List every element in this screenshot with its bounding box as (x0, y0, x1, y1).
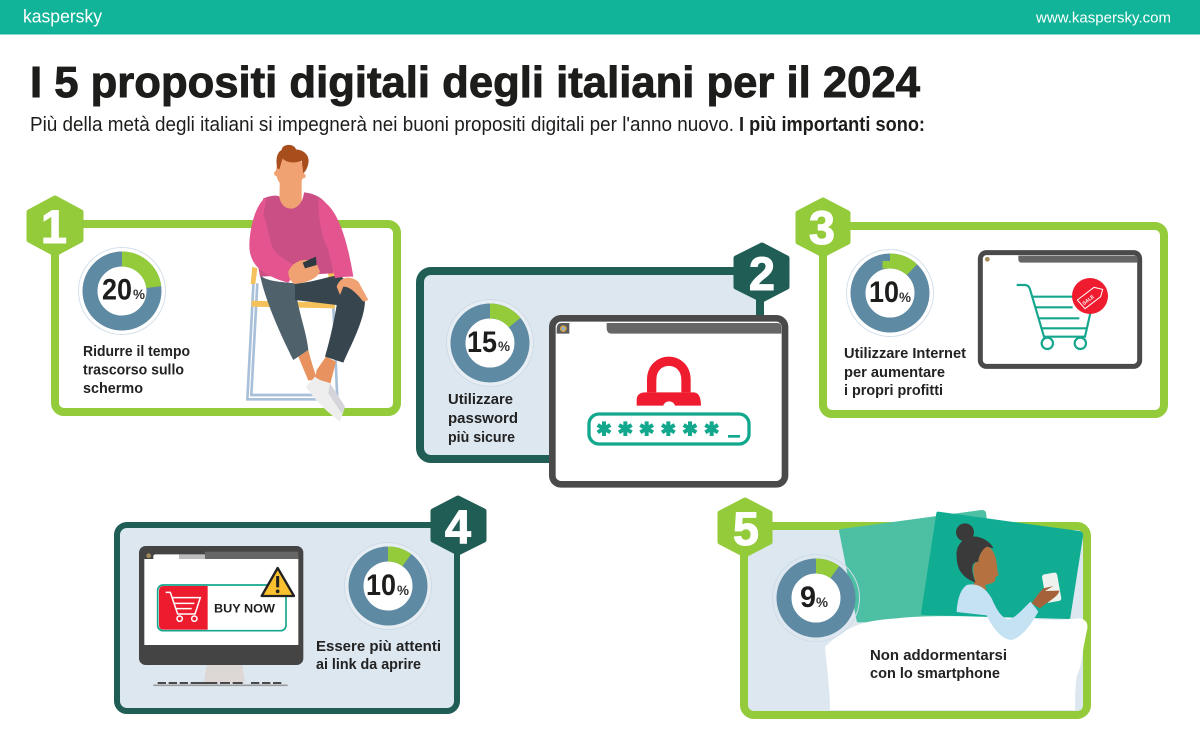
browser window with lock and password (552, 318, 785, 484)
badge 5 (720, 500, 770, 555)
label 3 (844, 345, 966, 399)
badge 2 (736, 245, 787, 300)
badge 3 (798, 200, 848, 255)
label 2 (448, 391, 518, 446)
title: I 5 propositi digitali degli italiani per il 2024 (30, 58, 921, 107)
label 1: Ridurre il tempo (83, 343, 190, 360)
panel 4 frame (117, 525, 457, 711)
woman's head (956, 523, 999, 590)
badge 4 (433, 498, 484, 553)
subtitle: Più della metà degli italiani si impegnerà nei buoni propositi digitali per l'anno nuovo. (30, 114, 734, 136)
header bar (0, 0, 1200, 34)
panel: 4 careful with links (117, 498, 484, 711)
header bar: www.kaspersky.com (1035, 10, 1171, 26)
illustration: woman in bed with phone (825, 512, 1087, 710)
donut 10%: 10 (869, 276, 899, 309)
panel 2 frame (420, 271, 760, 459)
panel: 3 online profits (798, 200, 1164, 414)
donut 20% (78, 248, 166, 334)
donut 15%: % (498, 338, 511, 354)
panel 5 frame (744, 526, 1087, 715)
donut 15%: 15 (467, 326, 497, 359)
label 1: trascorso sullo (83, 362, 184, 378)
subtitle: I più importanti sono: (739, 114, 925, 136)
label 3: per aumentare (844, 364, 945, 381)
donut 20%: % (133, 286, 146, 302)
label 2: più sicure (448, 429, 515, 446)
label 5 (870, 647, 1007, 682)
badge 4: 4 (445, 500, 471, 553)
donut 9%: 9 (800, 581, 816, 614)
label 1: schermo (83, 380, 143, 397)
donut 15% (446, 300, 534, 386)
illustration: seated man with phone (247, 145, 368, 422)
panel: 2 passwords (420, 245, 787, 484)
label 1 (83, 343, 190, 397)
label 3: i propri profitti (844, 382, 943, 399)
header bar: kaspersky (23, 6, 103, 26)
label 3: Utilizzare Internet (844, 345, 966, 362)
panel 1 frame (55, 224, 397, 412)
donut 9% (772, 554, 860, 642)
monitor with buy now button: BUY NOW (214, 602, 276, 616)
donut 10% (344, 542, 432, 630)
badge 3: 3 (809, 201, 835, 254)
label 2: password (448, 410, 518, 427)
browser window with shopping cart and sale tag: SALE (1082, 294, 1096, 307)
label 2: Utilizzare (448, 391, 513, 408)
badge 1: 1 (41, 200, 67, 253)
donut 10%: 10 (366, 569, 396, 602)
label 4: ai link da aprire (316, 656, 421, 673)
badge 1 (29, 198, 81, 254)
donut 10%: % (899, 289, 912, 305)
label 4: Essere più attenti (316, 638, 441, 655)
donut 10%: % (397, 582, 410, 598)
panel: 5 smartphone in bed (720, 500, 1087, 715)
donut 20%: 20 (102, 274, 132, 306)
donut 9%: % (816, 594, 829, 610)
donut 10% (846, 250, 934, 336)
label 5: Non addormentarsi (870, 647, 1007, 664)
badge 5: 5 (733, 502, 759, 555)
panel 3 frame (823, 226, 1164, 414)
label 4 (316, 638, 441, 673)
monitor with buy now button (139, 546, 303, 685)
browser window with shopping cart and sale tag (980, 253, 1140, 366)
label 5: con lo smartphone (870, 665, 1000, 682)
panel: 1 screen time (29, 145, 397, 422)
badge 2: 2 (749, 247, 775, 300)
